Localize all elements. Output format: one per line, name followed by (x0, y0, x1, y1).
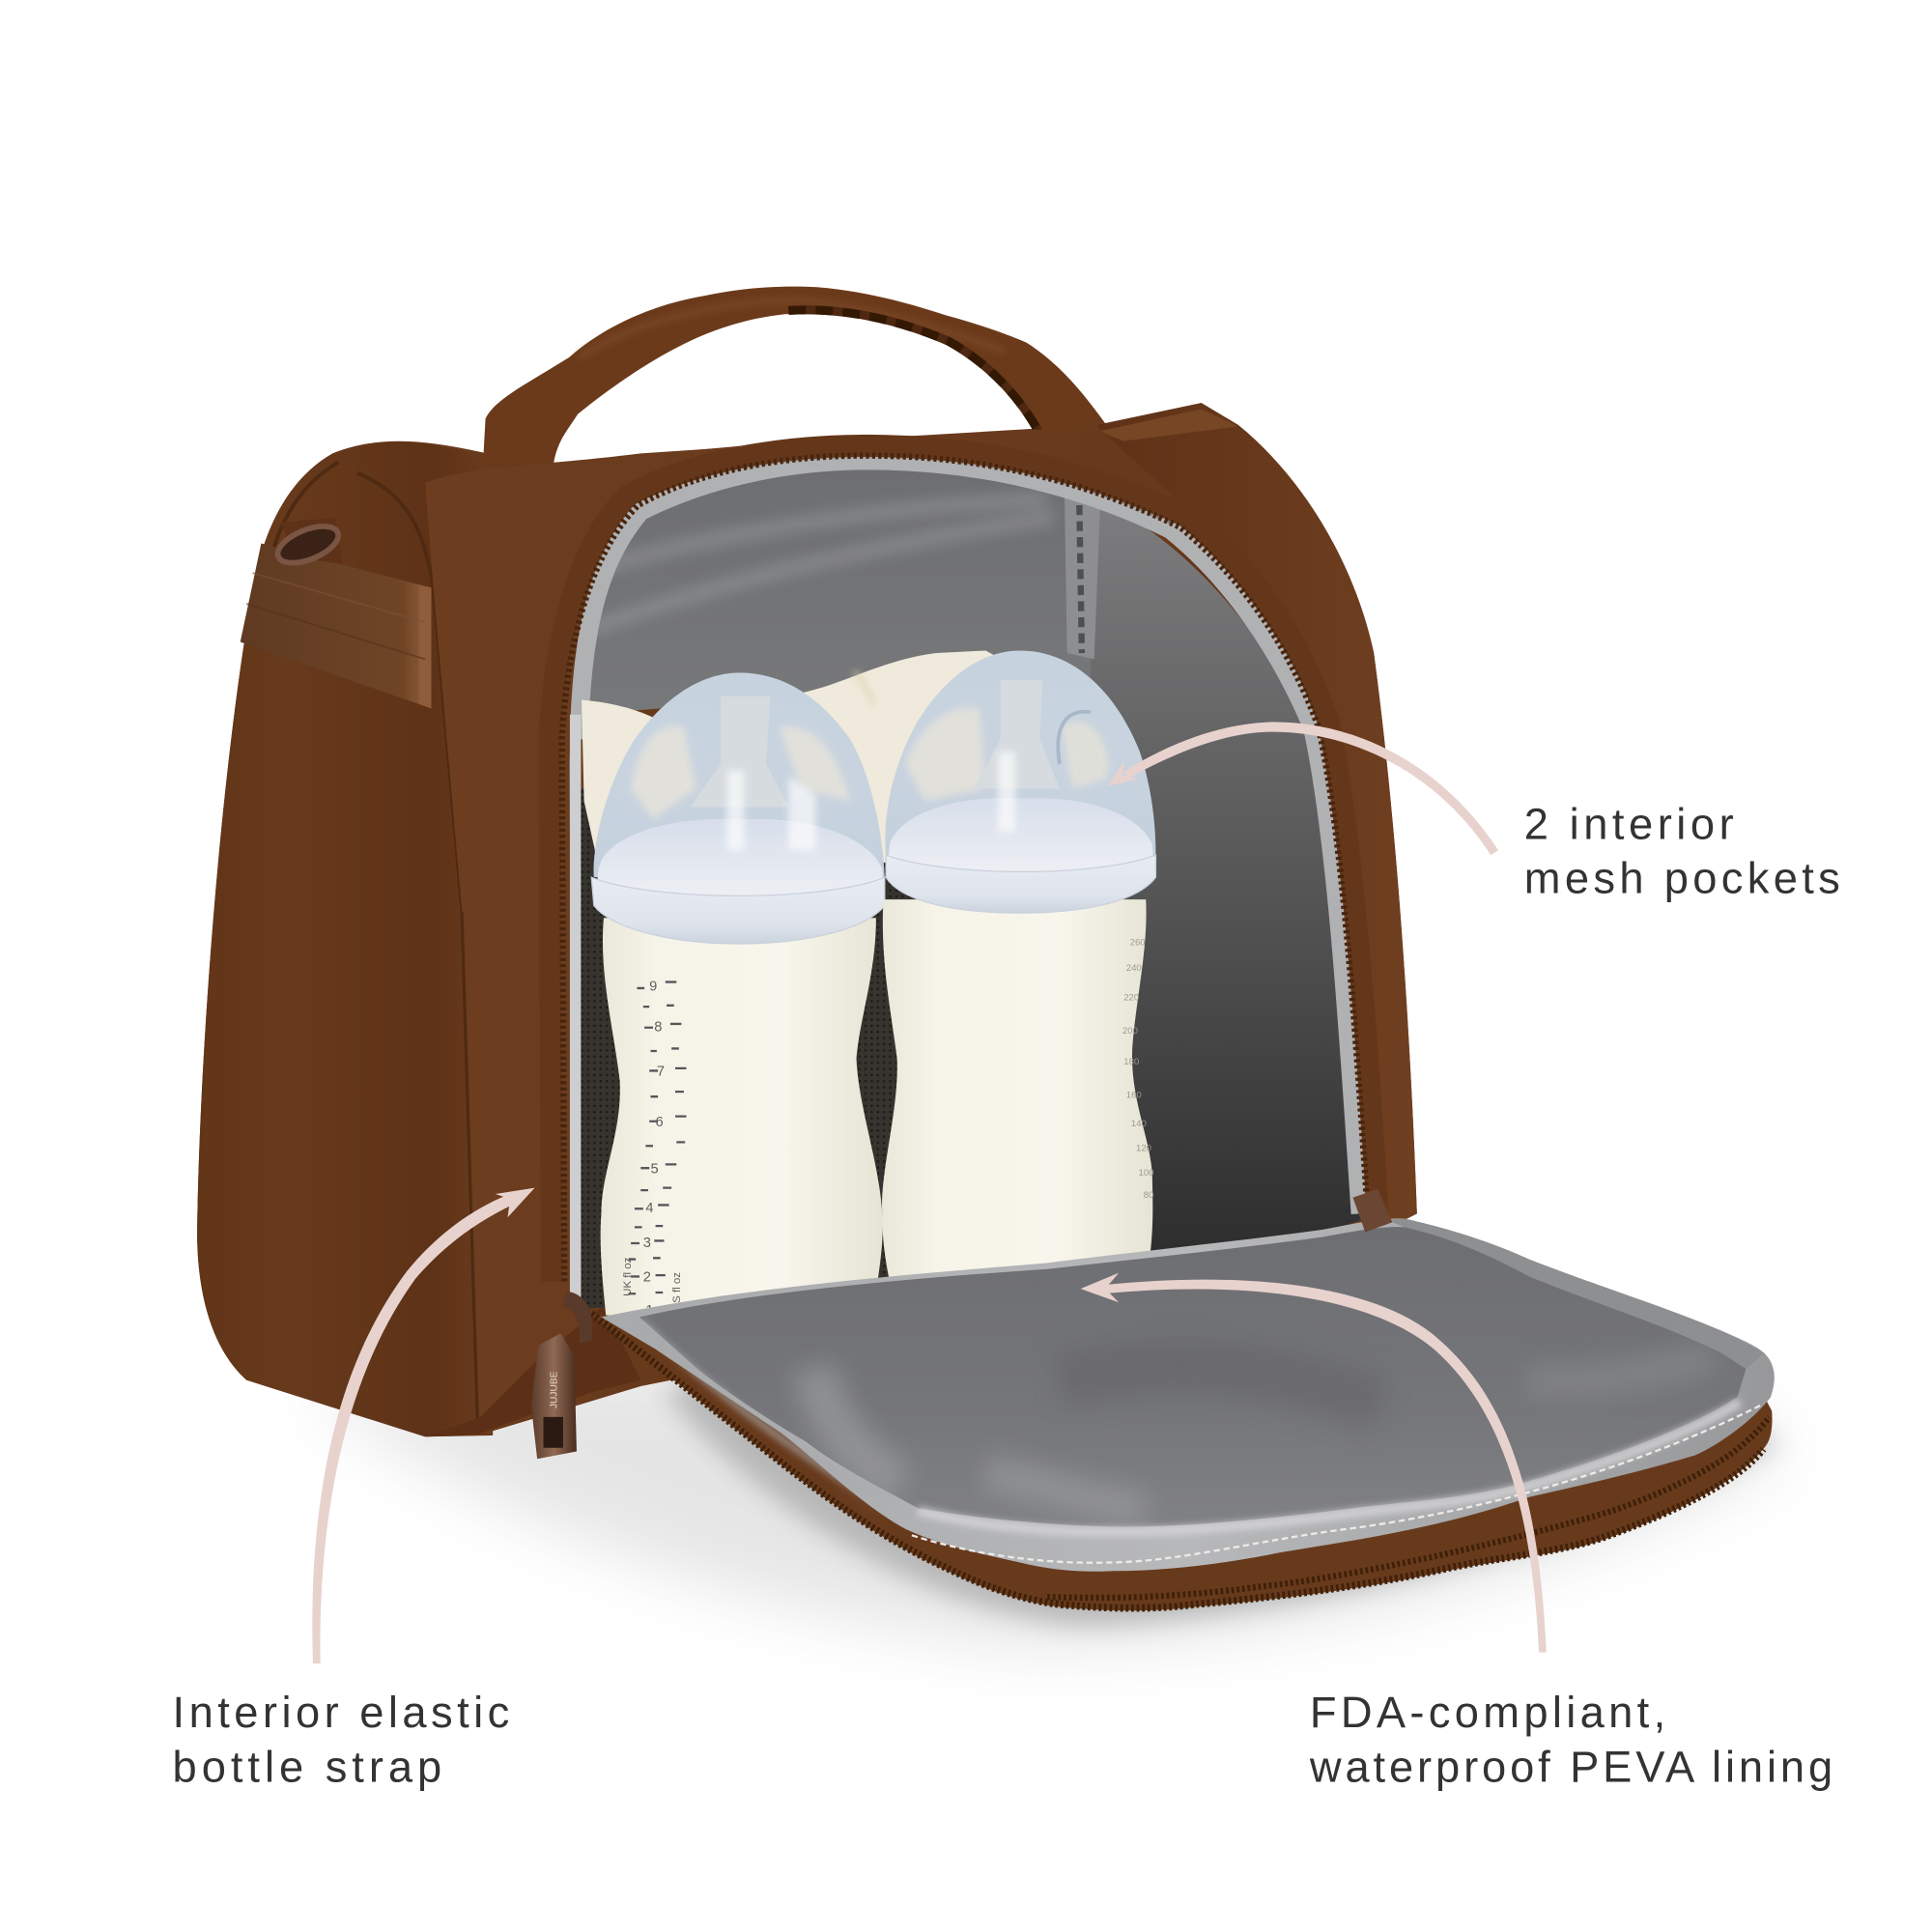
bottle measurement scale: UK fl oz (622, 1257, 634, 1296)
arrow: elastic bottle strap (312, 1188, 535, 1663)
arrow: FDA lining (1081, 1273, 1547, 1652)
bottle ml scale: 120 (1136, 1143, 1151, 1153)
flap highlights (813, 1368, 899, 1485)
bottle measurement scale: 1 (645, 1303, 654, 1319)
bottle measurement scale: 6 (656, 1115, 664, 1130)
bottle ml scale: 140 (1131, 1119, 1147, 1129)
bag backing silhouette (197, 403, 1417, 1436)
side panel (197, 441, 493, 1436)
callout text: 2 interior mesh pockets: 2 interior (1524, 800, 1738, 849)
arrow: 2 interior mesh pockets (1108, 722, 1498, 855)
bottom base (425, 1306, 640, 1436)
back wall (569, 461, 1091, 1306)
interior divider (1065, 497, 1100, 659)
webbing strap (241, 543, 431, 708)
zipper pull: JUJUBE (550, 1371, 560, 1408)
mesh pocket (579, 690, 1146, 1309)
shoulder strap ring (272, 518, 343, 570)
open flap (589, 1218, 1775, 1610)
bottle ml scale: 220 (1123, 993, 1139, 1004)
lining streaks (591, 499, 1054, 629)
callout text: interior elastic bottle strap: Interior elastic (173, 1688, 514, 1737)
silver binding (579, 461, 1360, 1213)
liquid dome (595, 819, 884, 897)
flap rim stitching (912, 1405, 1762, 1563)
bottle measurement scale: 7 (657, 1065, 665, 1080)
bottle: left (591, 672, 885, 1319)
callout text: interior elastic bottle strap: bottle strap (173, 1742, 446, 1791)
zipper pull (531, 1189, 1392, 1459)
main zipper track (550, 445, 1378, 1282)
bag (197, 287, 1775, 1610)
bottle ml scale: 240 (1126, 963, 1142, 974)
milk body (882, 899, 1152, 1282)
callout text: 2 interior mesh pockets: mesh pockets (1524, 854, 1844, 903)
callout text: FDA lining: FDA-compliant, (1310, 1688, 1669, 1737)
bottle ml scale (1122, 937, 1154, 1201)
callout text: interior elastic bottle strap (173, 1688, 514, 1791)
hood (593, 672, 885, 877)
bottle measurement scale: 9 (649, 980, 657, 995)
rolled cloth behind bottles (582, 650, 1115, 863)
bottle ml scale: 160 (1126, 1090, 1142, 1100)
bottle ml scale: 80 (1144, 1190, 1153, 1201)
right outer shell (1096, 403, 1417, 1244)
milk body (601, 918, 883, 1319)
callout text: FDA lining (1309, 1688, 1836, 1791)
callout text: FDA lining: waterproof PEVA lining (1309, 1742, 1836, 1791)
front frame panel (425, 426, 1182, 1435)
bottle ml scale: 200 (1122, 1026, 1138, 1037)
ground shadow (308, 1355, 1786, 1645)
hood (885, 650, 1155, 855)
bottle measurement scale: 2 (643, 1270, 651, 1286)
interior (569, 456, 1363, 1309)
right wall (1084, 493, 1363, 1269)
bottle measurement scale: US fl oz (671, 1272, 683, 1311)
flap back strip (1386, 1218, 1765, 1369)
bottle measurement scale: 5 (650, 1161, 659, 1177)
bottle measurement scale: 3 (643, 1236, 651, 1251)
callout text: 2 interior mesh pockets (1524, 800, 1844, 903)
bottle: right (882, 650, 1155, 1282)
bottle ml scale: 180 (1123, 1057, 1139, 1067)
liquid dome (887, 798, 1154, 872)
flap zipper tape (589, 1314, 1772, 1610)
collar (886, 855, 1155, 913)
bottle ml scale: 100 (1139, 1168, 1154, 1179)
bottle measurement scale (622, 980, 686, 1319)
flap silver surface (639, 1227, 1746, 1526)
top carry handle (483, 287, 1106, 466)
bottle measurement scale: 4 (645, 1201, 654, 1216)
bottle measurement scale: 8 (654, 1020, 662, 1036)
collar (591, 877, 885, 944)
bottle ml scale: 260 (1130, 937, 1146, 948)
flap silver rim (601, 1218, 1775, 1572)
